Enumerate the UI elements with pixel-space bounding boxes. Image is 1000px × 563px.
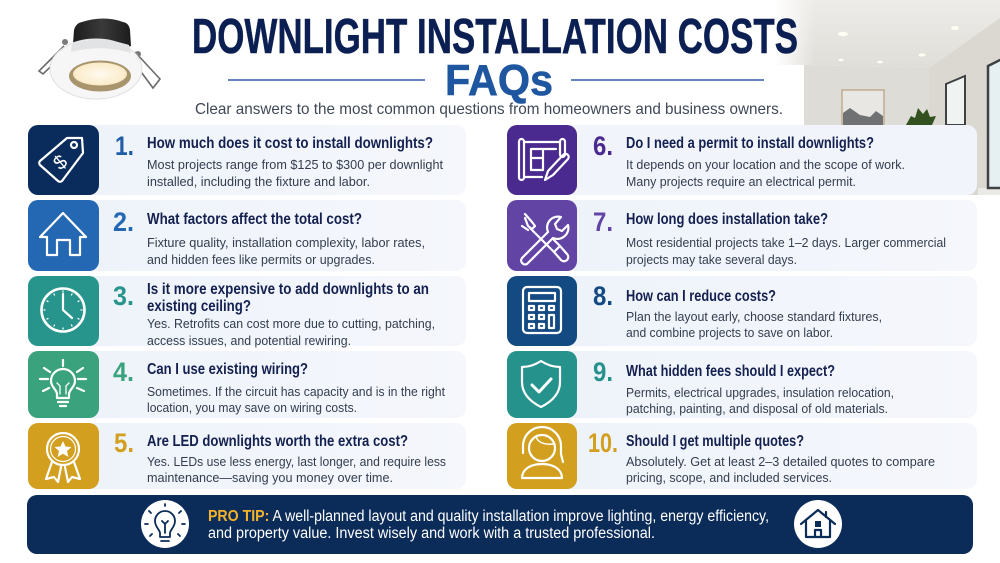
panel: FAQ 9: What hidden fees should I expect? [626,363,835,380]
banner: pro tip [27,495,973,554]
panel: FAQ 3: 3. [113,281,134,311]
icon: light bulb [28,351,99,418]
panel: FAQ 4: Can I use existing wiring? [147,361,308,378]
panel: FAQ 10: 10. [588,428,618,458]
panel: FAQ 8 [507,276,977,346]
panel: FAQ 5: Yes. LEDs use less energy, last longer, and require less [147,454,446,469]
panel: FAQ 5: Are LED downlights worth the extra cost? [147,433,408,450]
panel: FAQ 6: Many projects require an electrical permit. [626,174,856,189]
panel: FAQ 3: existing ceiling? [147,298,251,315]
icon: award ribbon [28,423,99,489]
panel: FAQ 8: and combine projects to save on labor. [626,325,833,340]
panel: FAQ 6: Do I need a permit to install downlights? [626,135,874,152]
panel: FAQ 1: 1. [115,131,134,161]
icon: house [28,200,99,271]
panel: FAQ 3 [28,276,466,348]
icon: blueprint and pencil [507,125,577,195]
panel: FAQ 2: What factors affect the total cost? [147,211,362,228]
panel: FAQ 6 [507,125,977,195]
icon: crossed tools [507,200,577,271]
panel: FAQ 8: How can I reduce costs? [626,288,776,305]
panel: FAQ 9 [507,351,977,418]
panel: FAQ 6: It depends on your location and the scope of work. [626,157,905,172]
text: pro tip: and property value. Invest wisely and work with a trusted professional. [208,525,655,542]
icon: shield check [507,351,577,418]
panel: FAQ 1 [28,125,466,195]
panel: FAQ 4: 4. [113,357,134,387]
panel: FAQ 7: projects may take several days. [626,252,797,267]
panel: FAQ 7: 7. [593,207,613,237]
panel: FAQ 7: Most residential projects take 1–2 days. Larger commercial [626,235,946,250]
panel: FAQ 4 [28,351,466,418]
panel: FAQ 2: and hidden fees like permits or upgrades. [147,252,375,267]
panel: FAQ 2 [28,200,466,271]
panel: FAQ 2: Fixture quality, installation complexity, labor rates, [147,235,425,250]
heading: FAQs with rules: FAQs [445,56,553,105]
panel: FAQ 1: How much does it cost to install downlights? [147,135,433,152]
icon: clock [28,276,99,346]
text: pro tip [208,508,769,542]
panel: FAQ 1: Most projects range from $125 to $300 per downlight [147,157,443,172]
panel: FAQ 5 [28,423,466,489]
panel: FAQ 3: Yes. Retrofits can cost more due to cutting, patching, [147,316,435,331]
panel: FAQ 5: 5. [114,428,134,458]
panel: FAQ 10: Should I get multiple quotes? [626,433,804,450]
photo: room with downlights [775,0,1000,195]
icon: price tag: $ [49,151,72,175]
panel: FAQ 3: access issues, and potential rewiring. [147,333,351,348]
panel: FAQ 2: 2. [113,207,134,237]
product photo: downlight fixture [39,18,160,99]
panel: FAQ 7 [507,200,977,271]
panel: FAQ 8: 8. [593,281,613,311]
panel: FAQ 6: 6. [593,131,613,161]
panel: FAQ 7: How long does installation take? [626,211,828,228]
panel: FAQ 3: Is it more expensive to add downlights to an [147,281,429,298]
panel: FAQ 9: 9. [593,357,613,387]
panel: FAQ 1: installed, including the fixture and labor. [147,174,370,189]
icon: price tag [28,125,99,195]
text: pro tip: PRO TIP: A well-planned layout and quality installation improve lighting, energy efficiency, [208,508,769,525]
icon: support agent [507,423,577,489]
panel: FAQ 10 [507,423,977,489]
icon: house in circle [794,500,842,548]
panel: FAQ 9: Permits, electrical upgrades, insulation relocation, [626,385,894,400]
icon: calculator [507,276,577,346]
icon: bulb in circle [141,500,189,548]
panel: FAQ 10: Absolutely. Get at least 2–3 detailed quotes to compare [626,454,935,469]
panel: FAQ 4: location, you may save on wiring costs. [147,400,357,415]
panel: FAQ 9: patching, painting, and disposal of old materials. [626,401,888,416]
subtitle: Clear answers to the most common questions from homeowners and business owners. [195,101,783,118]
panel: FAQ 10: pricing, scope, and included services. [626,470,832,485]
panel: FAQ 4: Sometimes. If the circuit has capacity and is in the right [147,384,445,399]
panel: FAQ 8: Plan the layout early, choose standard fixtures, [626,309,882,324]
panel: FAQ 5: maintenance—saving you money over time. [147,470,393,485]
